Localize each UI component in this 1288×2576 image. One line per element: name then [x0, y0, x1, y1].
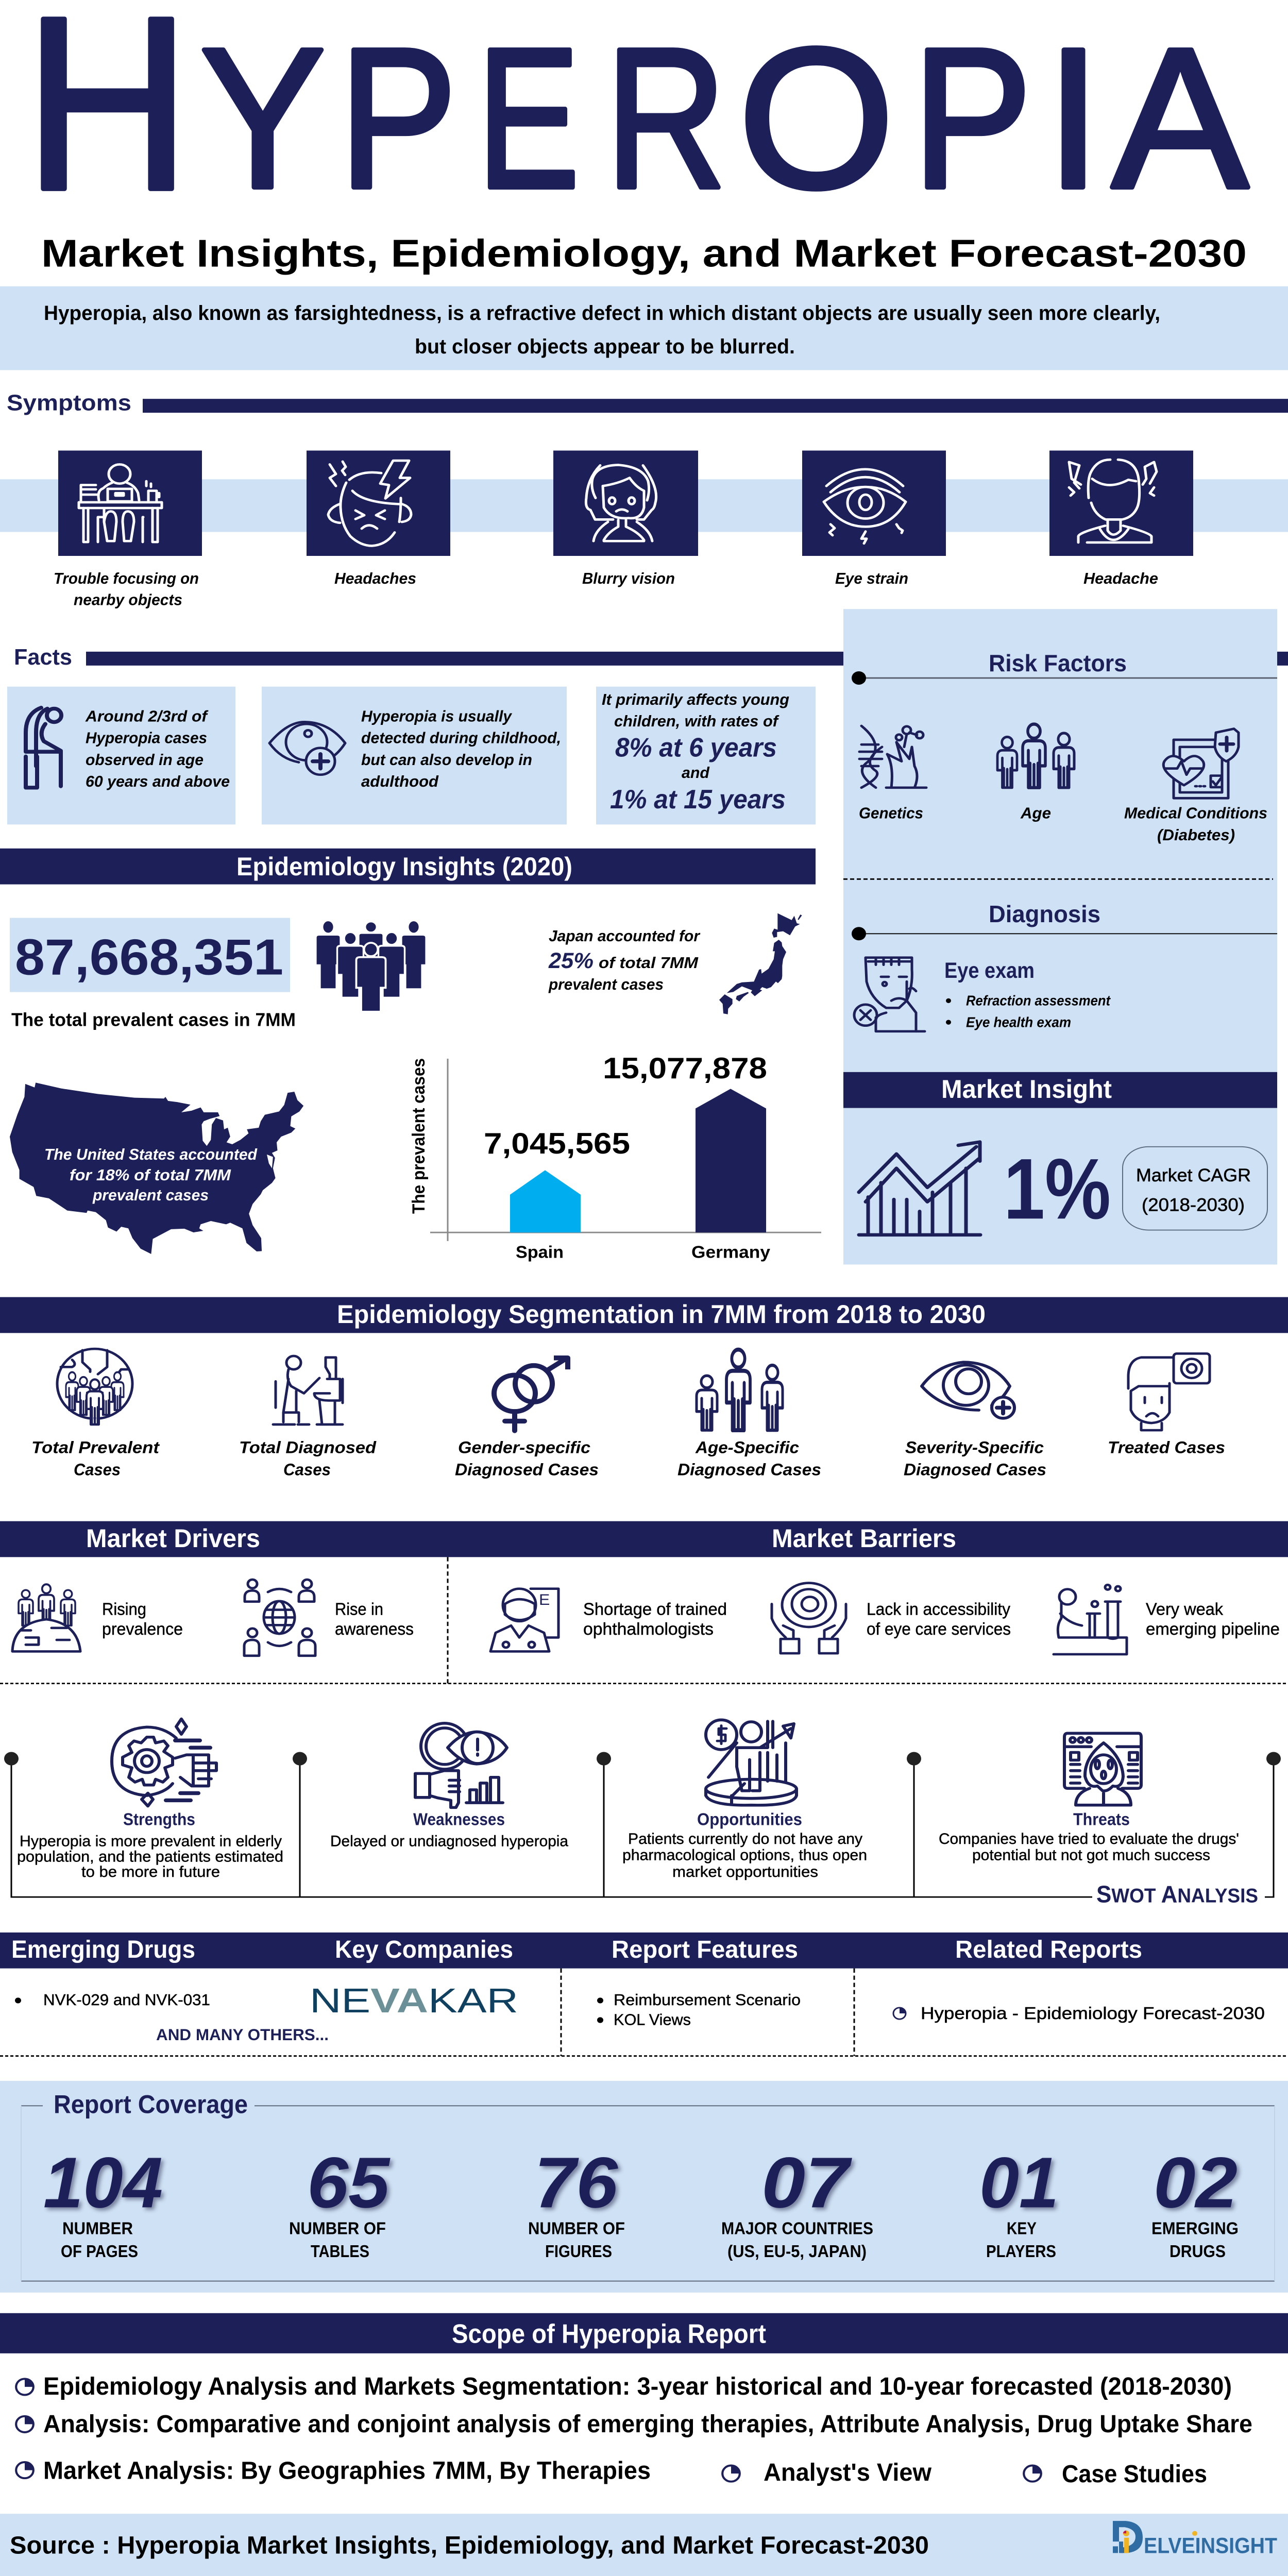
heading: epidemiology segmentation: Epidemiology Segmentation in 7MM from 2018 to 2030 — [337, 1300, 986, 1329]
panel: report coverage — [0, 2081, 1288, 2293]
fact 2 text: detected during childhood, — [361, 728, 561, 747]
heading: diagnosis — [852, 901, 1277, 940]
heading: epidemiology insights — [0, 849, 816, 885]
barrier text: ophthalmologists — [583, 1620, 714, 1639]
title: Y — [200, 7, 326, 230]
stats labels: KEY — [1007, 2219, 1037, 2238]
stats labels: TABLES — [311, 2242, 369, 2261]
icon: growth chart — [859, 1142, 980, 1235]
label: weaknesses: Delayed or undiagnosed hyperopia — [330, 1833, 569, 1850]
stats numbers: 01 — [979, 2142, 1059, 2223]
stats labels: NUMBER — [62, 2219, 133, 2238]
stats numbers: 65 — [307, 2142, 391, 2223]
segmentation labels: Gender-specific — [458, 1438, 590, 1457]
icon: genetics — [859, 726, 926, 788]
segmentation labels: Age-Specific — [695, 1438, 799, 1457]
icon: weaknesses — [415, 1723, 507, 1807]
heading: market insight — [843, 1072, 1277, 1108]
risk factor labels: (Diabetes) — [1157, 826, 1235, 844]
heading: symptoms: Symptoms — [7, 390, 131, 415]
icon: shortage of ophthalmologists: E — [539, 1591, 550, 1608]
fact 1 text: 60 years and above — [86, 772, 230, 790]
heading: drivers and barriers — [0, 1521, 1288, 1557]
segmentation labels: Diagnosed Cases — [904, 1461, 1046, 1479]
category: spain: Spain — [516, 1243, 564, 1262]
stats labels — [61, 2219, 1239, 2261]
callout: japan — [548, 927, 701, 993]
diagnosis text: Eye health exam — [966, 1014, 1071, 1030]
callout: market cagr: Market CAGR — [1136, 1165, 1251, 1185]
panel: emerging drugs: NVK-029 and NVK-031 — [43, 1991, 210, 2009]
map: united states: The United States accounted — [44, 1145, 258, 1163]
label: strengths — [17, 1810, 283, 1880]
stats labels: EMERGING — [1151, 2219, 1239, 2238]
label: opportunities: Patients currently do not have any — [628, 1830, 863, 1848]
panel: fact 3: 8% at 6 years — [615, 733, 777, 762]
callout: japan: of total 7MM — [599, 954, 699, 972]
callout: market cagr — [1123, 1147, 1267, 1230]
label: weaknesses: Weaknesses — [413, 1810, 505, 1829]
symptom labels: Trouble focusing on — [54, 569, 199, 587]
stats numbers: 02 — [1154, 2142, 1238, 2223]
heading: drugs, companies, features, related: Report Features — [612, 1936, 798, 1963]
map: united states: prevalent cases — [92, 1186, 209, 1204]
panel: report features: KOL Views — [614, 2010, 691, 2028]
title: O — [738, 7, 894, 230]
panel: definition: Hyperopia, also known as farsightedness, is a refractive defect in which distant objects are usually seen more clearly, — [44, 301, 1160, 324]
y axis label: The prevalent cases — [409, 1058, 428, 1214]
stat: market cagr: 1% — [1004, 1141, 1111, 1237]
heading: market insight: Market Insight — [941, 1075, 1112, 1104]
panel: report features — [597, 1991, 801, 2028]
stats numbers: 07 — [761, 2142, 853, 2223]
stats labels: MAJOR COUNTRIES — [721, 2219, 873, 2238]
risk factor labels — [859, 804, 1267, 844]
risk factor labels: Age — [1020, 804, 1051, 822]
stats labels: NUMBER OF — [289, 2219, 386, 2238]
barrier text: of eye care services — [867, 1620, 1011, 1639]
heading: report coverage: Report Coverage — [54, 2090, 248, 2119]
stats labels: OF PAGES — [61, 2242, 138, 2261]
callout: japan: prevalent cases — [548, 975, 664, 993]
fact 2 text: but can also develop in — [361, 751, 532, 769]
icon: age-specific — [697, 1350, 783, 1430]
panel: risk, diagnosis, market insight — [843, 609, 1277, 1264]
icon: severity-specific — [922, 1362, 1014, 1418]
icon: age — [997, 724, 1074, 788]
footer: source: Source : Hyperopia Market Insights, Epidemiology, and Market Forecast-2030 — [10, 2531, 929, 2559]
icon: total prevalent cases — [57, 1349, 132, 1425]
heading: drugs, companies, features, related: Key Companies — [335, 1936, 513, 1963]
icon: headaches — [307, 451, 450, 556]
logo: delveinsight — [1113, 2521, 1277, 2558]
driver text: awareness — [335, 1620, 414, 1639]
heading: drugs, companies, features, related: Emerging Drugs — [11, 1936, 195, 1963]
label: threats: potential but not got much success — [972, 1846, 1210, 1863]
icon: eye with plus — [269, 722, 345, 775]
panel: fact 1 — [7, 687, 235, 824]
map: united states — [10, 1082, 303, 1254]
icon: elderly person — [26, 708, 61, 788]
panel: scope bullets: Analyst's View — [764, 2459, 932, 2486]
panel: fact 3: 1% at 15 years — [610, 785, 786, 814]
panel: market drivers — [12, 1580, 414, 1656]
heading: risk factors: Risk Factors — [989, 650, 1127, 677]
label: opportunities: market opportunities — [672, 1863, 818, 1880]
barrier text: Lack in accessibility — [867, 1600, 1011, 1619]
panel: fact 2 — [262, 687, 567, 824]
panel: related reports: Hyperopia - Epidemiology Forecast-2030 — [921, 2004, 1265, 2023]
value: germany: 15,077,878 — [603, 1052, 767, 1084]
title: R — [605, 7, 726, 230]
diagnosis text — [944, 958, 1111, 1030]
segmentation labels: Total Diagnosed — [239, 1438, 377, 1457]
segmentation labels: Cases — [74, 1461, 121, 1479]
panel: swot analysis — [4, 1719, 1281, 1908]
label: strengths: to be more in future — [81, 1863, 220, 1880]
icon: group of people — [316, 920, 426, 1012]
stats numbers: 76 — [534, 2142, 618, 2223]
symptom labels: Blurry vision — [582, 569, 675, 587]
fact 1 text: Hyperopia cases — [86, 728, 207, 747]
panel: market barriers — [490, 1583, 1280, 1654]
barrier text: Shortage of trained — [583, 1600, 727, 1619]
title: I — [1045, 7, 1101, 230]
bar: germany — [696, 1089, 766, 1232]
heading: diagnosis: Diagnosis — [989, 901, 1100, 928]
label: opportunities — [622, 1810, 867, 1880]
icon: total diagnosed cases — [273, 1356, 343, 1425]
stats labels: FIGURES — [545, 2242, 612, 2261]
barrier text — [583, 1600, 1280, 1639]
panel: definition — [0, 286, 1288, 370]
panel: report features: Reimbursement Scenario — [614, 1991, 801, 2009]
icon: weak pipeline — [1054, 1585, 1127, 1654]
heading: epidemiology segmentation — [0, 1297, 1288, 1333]
stat: total prevalent cases: 87,668,351 — [15, 928, 283, 985]
heading: drivers and barriers: Market Barriers — [772, 1524, 956, 1553]
panel: scope bullets — [16, 2372, 1252, 2487]
stats labels: NUMBER OF — [528, 2219, 625, 2238]
heading: drugs, companies, features, related — [0, 1933, 1288, 1969]
segmentation labels: Treated Cases — [1108, 1438, 1225, 1457]
label: threats: Threats — [1073, 1810, 1130, 1829]
segmentation labels: Cases — [283, 1461, 331, 1479]
text: and many others: AND MANY OTHERS... — [156, 2025, 329, 2044]
risk factor labels: Medical Conditions — [1124, 804, 1267, 822]
icon: headache — [1049, 451, 1193, 556]
symptom labels — [54, 569, 1158, 608]
diagnosis text: Eye exam — [944, 958, 1035, 982]
panel: segmentation icons — [31, 1349, 1225, 1479]
heading: facts: Facts — [14, 644, 72, 670]
title: E — [477, 7, 580, 230]
icon: rise in awareness — [244, 1580, 315, 1656]
segmentation labels: Severity-Specific — [905, 1438, 1044, 1457]
fact 1 text: observed in age — [86, 751, 204, 769]
stats labels: PLAYERS — [986, 2242, 1056, 2261]
footer: source — [0, 2514, 1288, 2576]
driver text: prevalence — [102, 1620, 183, 1639]
label: opportunities: pharmacological options, thus open — [622, 1846, 867, 1863]
driver text — [102, 1600, 414, 1639]
label: strengths: Hyperopia is more prevalent in elderly — [20, 1833, 282, 1850]
icon: eye exam — [854, 958, 925, 1031]
icon: shortage of ophthalmologists — [490, 1589, 558, 1651]
icon: lack in accessibility — [772, 1583, 846, 1653]
panel: definition: but closer objects appear to be blurred. — [415, 334, 795, 358]
barrier text: emerging pipeline — [1146, 1620, 1280, 1639]
subtitle: Market Insights, Epidemiology, and Market Forecast-2030 — [41, 231, 1247, 275]
panel: symptoms — [0, 451, 1288, 608]
driver text: Rise in — [335, 1600, 383, 1619]
symptom labels: Eye strain — [835, 569, 908, 587]
callout: japan: 25% — [548, 949, 594, 973]
stat: total prevalent cases: The total prevalent cases in 7MM — [11, 1009, 296, 1030]
segmentation labels: Diagnosed Cases — [677, 1461, 821, 1479]
label: strengths: Strengths — [123, 1810, 195, 1829]
risk factor labels: Genetics — [859, 804, 923, 822]
stat: total prevalent cases — [10, 918, 296, 1030]
callout: japan: Japan accounted for — [549, 927, 701, 945]
driver text: Rising — [102, 1600, 146, 1619]
swot title: SWOT ANALYSIS — [1096, 1881, 1258, 1908]
panel: fact 3: children, with rates of — [614, 712, 779, 730]
icon: threats — [1064, 1733, 1141, 1805]
stats labels: (US, EU-5, JAPAN) — [727, 2242, 867, 2261]
icon: trouble focusing — [58, 451, 202, 556]
bar: spain — [510, 1170, 581, 1232]
panel: scope bullets: Case Studies — [1062, 2460, 1207, 2487]
segmentation labels: Total Prevalent — [31, 1438, 160, 1457]
symptom labels: Headaches — [334, 569, 416, 587]
title: P — [912, 7, 1032, 230]
symptom labels: nearby objects — [74, 591, 182, 608]
label: threats: Companies have tried to evaluate the drugs' — [939, 1830, 1239, 1848]
panel: scope bullets: Market Analysis: By Geographies 7MM, By Therapies — [43, 2456, 651, 2484]
logo: nevakar: NE VAKAR — [310, 1981, 518, 2020]
callout: market cagr: (2018-2030) — [1142, 1195, 1245, 1215]
heading: risk factors — [852, 650, 1277, 685]
heading: scope of report — [0, 2313, 1288, 2353]
fact 2 text — [361, 707, 561, 790]
map: united states: for 18% of total 7MM — [70, 1166, 231, 1184]
heading: facts — [14, 644, 1288, 670]
icon: opportunities — [706, 1720, 796, 1805]
value: spain: 7,045,565 — [484, 1127, 630, 1160]
heading: symptoms — [7, 390, 1288, 415]
heading: epidemiology insights: Epidemiology Insights (2020) — [236, 853, 572, 881]
category: germany: Germany — [691, 1243, 771, 1262]
heading: drivers and barriers: Market Drivers — [86, 1524, 260, 1553]
icon: blurry vision — [553, 451, 698, 556]
panel: fact 3: and — [682, 764, 710, 782]
fact 1 text — [85, 707, 230, 790]
fact 1 text: Around 2/3rd of — [85, 707, 209, 725]
label: weaknesses — [330, 1810, 569, 1850]
title: A — [1112, 7, 1249, 230]
fact 2 text: Hyperopia is usually — [361, 707, 513, 725]
barrier text: Very weak — [1146, 1600, 1224, 1619]
segmentation labels: Diagnosed Cases — [455, 1461, 599, 1479]
icon: gender symbol — [494, 1358, 568, 1431]
icon: japan map — [719, 913, 802, 1014]
stats labels: DRUGS — [1170, 2242, 1226, 2261]
heading: drugs, companies, features, related: Related Reports — [955, 1936, 1142, 1963]
bar chart: prevalent cases — [409, 1052, 821, 1262]
icon: treated cases — [1128, 1353, 1210, 1430]
stats numbers: 104 — [43, 2142, 163, 2223]
panel: fact 3: It primarily affects young — [602, 690, 789, 708]
label: opportunities: Opportunities — [697, 1810, 802, 1829]
segmentation labels — [31, 1438, 1225, 1479]
heading: scope of report: Scope of Hyperopia Report — [452, 2319, 766, 2349]
label: threats — [939, 1810, 1239, 1863]
title: P — [339, 7, 457, 230]
panel: fact 3 — [596, 687, 816, 824]
icon: eye strain — [802, 451, 946, 556]
stats numbers — [43, 2142, 1238, 2223]
icon: rising prevalence — [12, 1584, 80, 1651]
icon: strengths — [112, 1719, 216, 1806]
label: strengths: population, and the patients estimated — [17, 1848, 283, 1865]
icon: medical conditions — [1163, 728, 1239, 798]
diagnosis text: Refraction assessment — [966, 993, 1111, 1009]
fact 2 text: adulthood — [361, 772, 439, 790]
symptom labels: Headache — [1083, 569, 1158, 587]
